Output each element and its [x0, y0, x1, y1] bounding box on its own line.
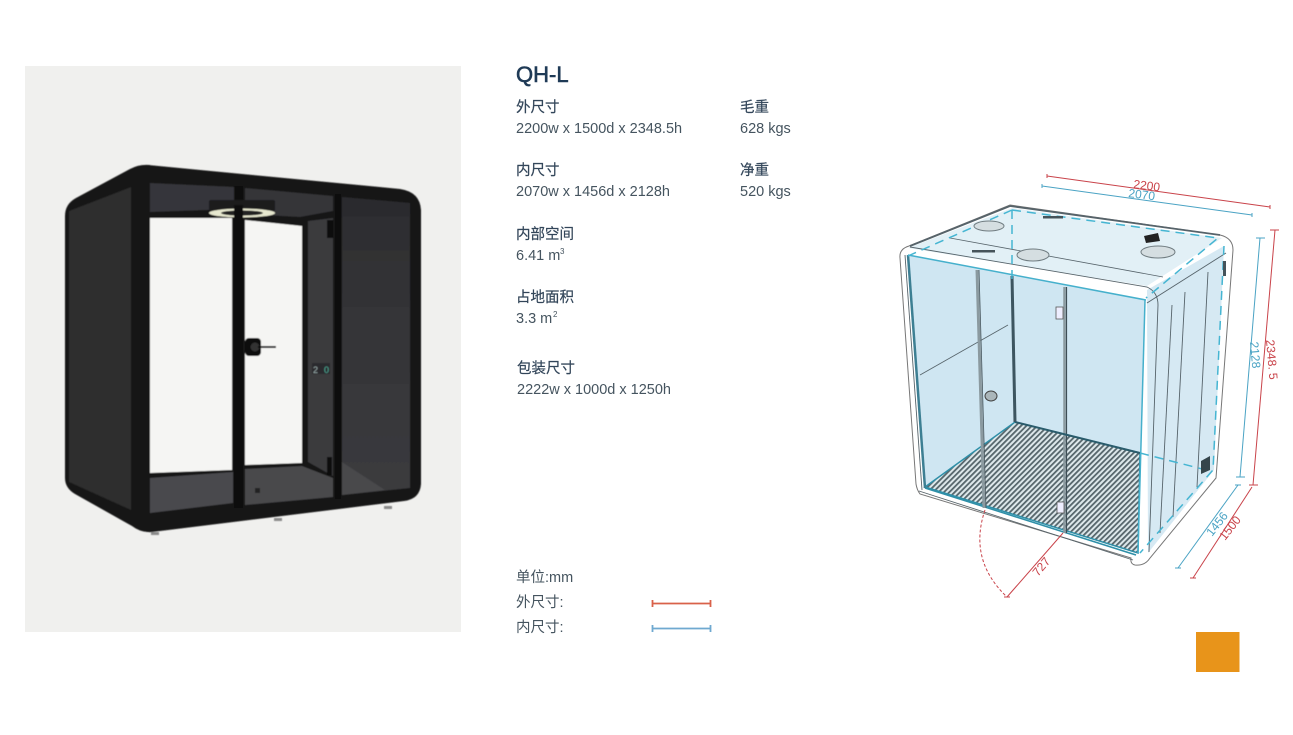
spec: inner size: 内尺寸: [516, 162, 560, 179]
door swing arc: 727: [1030, 554, 1053, 579]
orange square: [1196, 632, 1240, 672]
spec: interior volume: 内部空间: [516, 226, 574, 243]
door swing arc: [980, 510, 1063, 597]
spec: net weight: 净重: [740, 162, 769, 179]
spec: interior volume: 6.41 m: [516, 248, 560, 264]
spec: inner size: 2070w x 1456d x 2128h: [516, 184, 670, 200]
side wall: [1147, 246, 1224, 553]
title: QH-L: [516, 62, 569, 87]
spec: inner size: [516, 162, 670, 200]
spec: package size: 2222w x 1000d x 1250h: [517, 382, 671, 398]
floor socket: [255, 488, 260, 493]
booth side wall: [65, 165, 152, 532]
legend: inner size: 内尺寸:: [516, 619, 564, 636]
frame lines: [905, 206, 1226, 560]
dimension: outer height: 2348. 5: [1263, 339, 1280, 380]
legend: outer size: [516, 594, 711, 611]
door handle: [245, 338, 276, 356]
control display: 0: [324, 365, 329, 375]
spec: gross weight: 毛重: [740, 99, 769, 116]
door window: [245, 220, 302, 465]
spec: outer size: 外尺寸: [516, 99, 560, 116]
front glass: [908, 255, 1145, 553]
booth front frame: [136, 165, 421, 532]
technical drawing: [900, 174, 1280, 597]
spec: interior volume: [516, 226, 574, 264]
roof device: [1144, 233, 1160, 243]
spec: outer size: 2200w x 1500d x 2348.5h: [516, 121, 682, 137]
outer shell: [900, 205, 1233, 565]
floor hatch: [925, 422, 1140, 553]
legend: inner size: [516, 619, 711, 636]
unit label: 单位:mm: [516, 569, 573, 586]
spec: outer size: [516, 99, 682, 137]
spec: footprint: 2: [553, 310, 558, 319]
dashed inner outline: [908, 210, 1224, 553]
spec: net weight: [740, 162, 791, 200]
dimension: outer width: [1047, 174, 1270, 209]
control display: 2: [313, 365, 318, 375]
control display: [312, 363, 330, 375]
spec: footprint: [516, 289, 574, 327]
dimension: outer depth: [1190, 487, 1252, 578]
door posts: [908, 255, 1146, 553]
dimension: inner width: 2070: [1128, 186, 1156, 203]
spec: net weight: 520 kgs: [740, 184, 791, 200]
dimension: outer depth: 1500: [1216, 513, 1244, 543]
panel: product photo: [25, 66, 461, 632]
left glass pane: [150, 218, 232, 473]
feet: [151, 506, 392, 535]
dimension: inner height: 2128: [1247, 341, 1263, 369]
legend: outer size: 外尺寸:: [516, 594, 564, 611]
spec: package size: [517, 360, 671, 398]
roof fans: [974, 221, 1175, 261]
spec: footprint: 占地面积: [516, 289, 574, 306]
legend: [516, 569, 711, 636]
dimension: outer height: [1249, 230, 1280, 485]
dimension: inner height: [1236, 238, 1265, 477]
dimension: inner depth: 1456: [1203, 509, 1231, 539]
dimension: outer width: 2200: [1133, 177, 1161, 194]
spec: package size: 包装尺寸: [517, 360, 575, 377]
top face: [908, 208, 1222, 286]
spec: footprint: 3.3 m: [516, 311, 552, 327]
spec: gross weight: 628 kgs: [740, 121, 791, 137]
dimension: inner width: [1042, 184, 1252, 217]
ceiling lamp: [209, 200, 275, 219]
roof labels and vents: [972, 216, 1226, 276]
right glass pane: [342, 197, 410, 495]
dimension: inner depth: [1175, 485, 1241, 568]
door posts: [234, 186, 243, 508]
booth photo: [65, 165, 421, 535]
spec: gross weight: [740, 99, 791, 137]
lock and hinges: [985, 307, 1210, 513]
spec: interior volume: 3: [560, 247, 565, 256]
